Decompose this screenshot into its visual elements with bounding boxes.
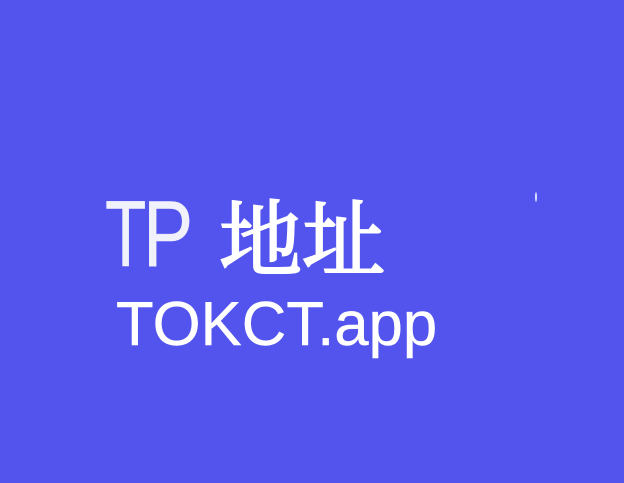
logo text: TP: T xyxy=(105,182,146,287)
heading: 地址: 地址 xyxy=(219,195,385,287)
address text: TOKCT.app: TOKCT.app xyxy=(116,290,437,359)
small white speck xyxy=(535,192,537,202)
logo text: TP xyxy=(105,182,193,287)
logo text: TP: P xyxy=(143,182,193,287)
